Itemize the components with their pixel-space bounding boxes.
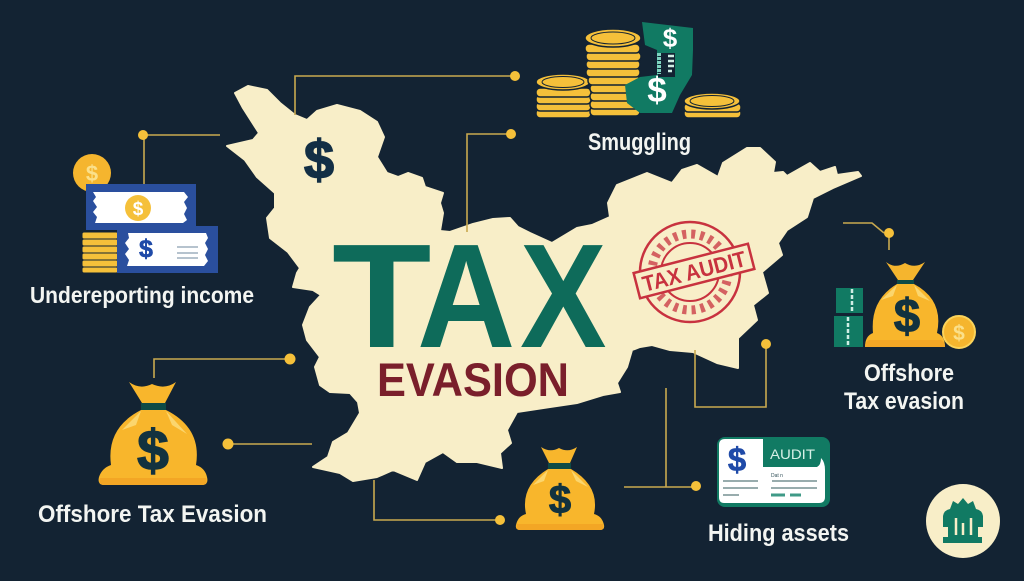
label: Underreporting income: Undereporting income	[30, 282, 254, 308]
icon: smuggling coins and cash: $	[663, 23, 678, 53]
map dollar sign: $	[304, 130, 334, 190]
label: Smuggling: Smuggling	[588, 129, 691, 156]
icon: offshore money bag right: $	[953, 322, 965, 345]
icon: offshore money bag left: $	[137, 419, 169, 483]
icon: money bag bottom: $	[549, 478, 571, 522]
icon: audit document: Dat n	[771, 473, 783, 479]
label: Offshore Tax Evasion left: Offshore Tax Evasion	[38, 501, 267, 528]
icon: smuggling coins and cash	[536, 22, 741, 118]
icon: audit document	[717, 437, 830, 507]
title: TAX: T	[332, 213, 431, 378]
icon: smuggling coins and cash: $	[647, 71, 667, 110]
title: EVASION: EVASION	[377, 353, 569, 406]
icon: emblem circle	[926, 484, 1000, 558]
icon: offshore money bag left	[99, 382, 207, 485]
label: Offshore Tax evasion right	[844, 360, 964, 415]
title: TAX: X	[520, 214, 606, 379]
icon: audit document: AUDIT	[770, 446, 815, 462]
icon: audit document: $	[728, 441, 746, 478]
title: TAX	[332, 213, 606, 379]
icon: money bag bottom	[516, 447, 604, 530]
map shape	[227, 86, 861, 481]
label: Hiding assets: Hiding assets	[708, 520, 849, 547]
connector dots	[138, 71, 894, 525]
stamp: tax audit	[634, 222, 754, 322]
icon: underreporting banknotes	[73, 154, 218, 273]
title: TAX: A	[417, 214, 515, 379]
icon: offshore money bag right	[834, 262, 975, 348]
icon: underreporting banknotes: $	[86, 161, 98, 186]
icon: offshore money bag right: $	[894, 289, 920, 342]
icon: underreporting banknotes: $	[133, 199, 144, 220]
stamp: tax audit: TAX AUDIT	[640, 246, 749, 297]
connector lines	[144, 76, 889, 520]
label: Offshore Tax evasion right: Offshore	[864, 360, 954, 387]
label: Offshore Tax evasion right: Tax evasion	[844, 388, 964, 415]
icon: underreporting banknotes: $	[139, 235, 153, 263]
